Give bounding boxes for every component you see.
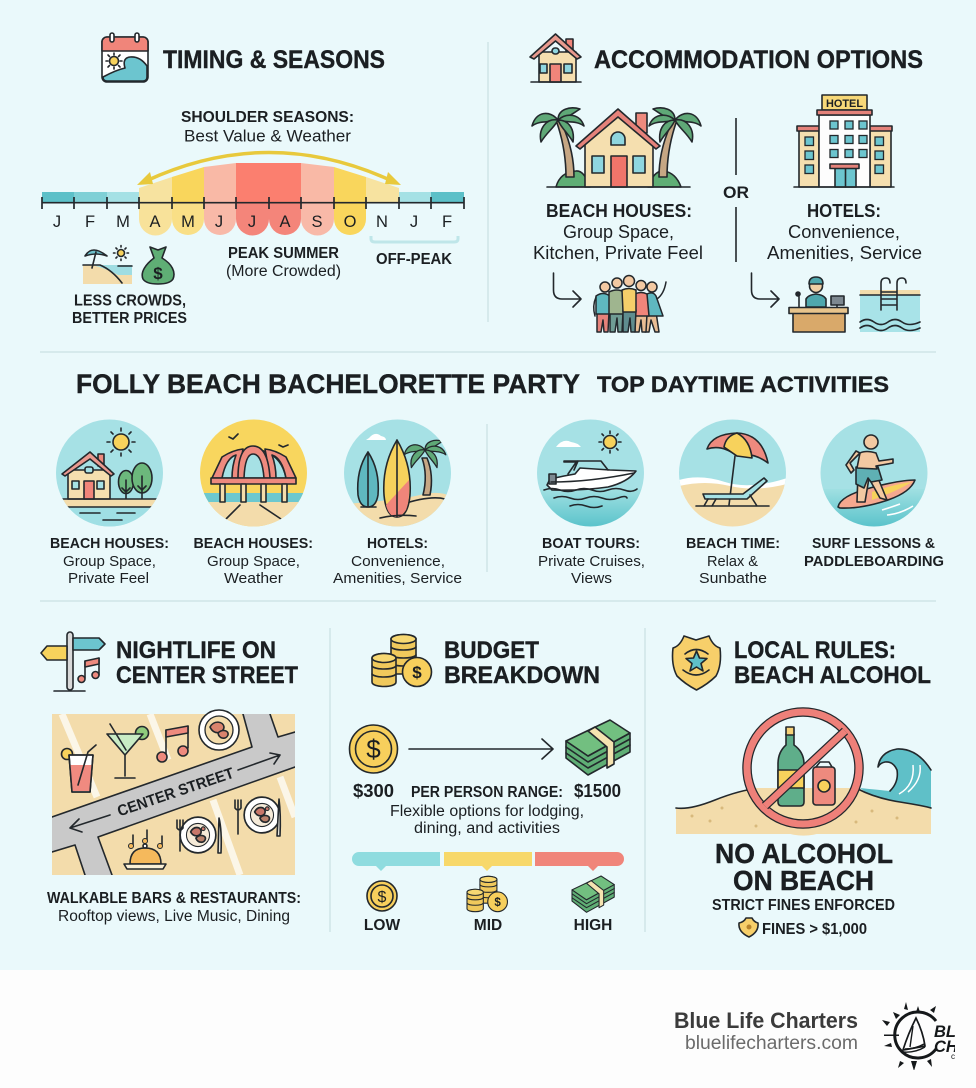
heading: ACCOMMODATION OPTIONS [594, 46, 923, 74]
icon: music note [157, 726, 188, 762]
panel: accommodation options [530, 34, 923, 332]
heading: LOCAL RULES: [734, 637, 896, 664]
text: beach houses: Kitchen, Private Feel [533, 243, 703, 263]
tier: mid: MID [474, 917, 502, 934]
text: surf lessons [804, 535, 944, 570]
fines callout [739, 918, 867, 938]
main title: FOLLY BEACH BACHELORETTE PARTY [76, 369, 580, 399]
icon circle: umbrella and lounger [679, 419, 787, 528]
text: walkable bars: Rooftop views, Live Music, Dining [58, 908, 290, 925]
icon: swimming pool [860, 278, 920, 332]
panel: timing and seasons [42, 33, 464, 327]
panel: surf lessons [804, 419, 944, 570]
heading: NIGHTLIFE ON [116, 637, 276, 664]
chart: season timeline: M [181, 213, 195, 231]
chart: season timeline: N [376, 213, 388, 231]
panel: budget breakdown [350, 634, 630, 934]
tier: low [364, 881, 400, 934]
icon circle: surfer [820, 419, 928, 528]
text: no alcohol on beach: ON BEACH [733, 865, 874, 896]
arrows along street [70, 753, 280, 832]
text: boat tours: Private Cruises, [538, 553, 645, 570]
arrow: range [409, 739, 553, 759]
text: per person range: dining, and activities [414, 820, 560, 837]
text: less crowds: LESS CROWDS, [74, 292, 186, 310]
heading [444, 637, 600, 689]
footer: sailboat compass logo [882, 1002, 955, 1070]
text: boat tours: Views [571, 570, 612, 587]
text: hotels: Amenities, Service [767, 243, 922, 263]
text: per person range: PER PERSON RANGE: [411, 784, 563, 801]
panel: boat tours [537, 419, 645, 587]
arrow: to hotel services [752, 273, 779, 307]
icon circle: house on shore [56, 419, 164, 529]
label: center street: CENTER STREET [115, 765, 237, 820]
text: hotels convenience: HOTELS: [367, 535, 428, 552]
icon circle: surfboards and palm [344, 419, 452, 528]
text: shoulder seasons: SHOULDER SEASONS: [181, 109, 354, 126]
icon: cocktail drink [62, 745, 96, 792]
chart: season timeline [42, 152, 464, 236]
heading: TIMING & SEASONS [163, 46, 385, 74]
text: beach houses: Group Space, [563, 222, 674, 242]
tier: low: $ [378, 889, 387, 906]
icon: money bag [142, 247, 174, 284]
footer: brand text: Blue Life Charters [674, 1008, 858, 1033]
icon: coin stacks [372, 634, 432, 686]
icon: calendar with sun and wave [102, 33, 148, 82]
chart: season timeline: J [215, 213, 223, 231]
off-peak bracket and label [371, 236, 458, 268]
tier: low: LOW [364, 917, 400, 934]
footer: sailboat compass logo: c [951, 1052, 955, 1061]
text: hotels: HOTELS: [807, 201, 881, 221]
footer: brand text: bluelifecharters.com [685, 1033, 858, 1054]
tier: mid [467, 876, 507, 934]
icon: cash stack [566, 720, 630, 775]
text: shoulder seasons: Best Value & Weather [184, 128, 352, 146]
tier: high [572, 876, 614, 934]
text: surf lessons: SURF LESSONS & [812, 535, 935, 552]
text: beach time: BEACH TIME: [686, 535, 780, 552]
chart: season timeline: F [85, 213, 95, 231]
icon: low coin [350, 725, 398, 773]
text: peak summer: (More Crowded) [226, 263, 341, 280]
heading [734, 637, 931, 689]
arrow: to group [554, 273, 581, 307]
text: hotels convenience: Amenities, Service [333, 570, 462, 587]
panel: nightlife on center street [41, 632, 301, 925]
text: no alcohol on beach: STRICT FINES ENFORCED [712, 897, 895, 914]
heading: BREAKDOWN [444, 662, 600, 689]
off-peak bracket and label: OFF-PEAK [376, 251, 453, 268]
panel: beach houses circle 1 [50, 419, 169, 587]
divider: or: OR [723, 183, 749, 202]
text: beach houses weather: BEACH HOUSES: [194, 535, 313, 552]
chart: season timeline: O [344, 213, 357, 231]
tier: high: HIGH [574, 917, 612, 934]
text: beach houses private feel: BEACH HOUSES: [50, 535, 169, 552]
text: beach houses private feel [50, 535, 169, 587]
icon circle: pavilion [200, 419, 308, 528]
chart: season timeline: M [116, 213, 130, 231]
illustration: beach house with palms [532, 108, 701, 187]
chart: season timeline: J [410, 213, 418, 231]
icon: signpost and music note [41, 632, 105, 691]
text: no alcohol on beach: NO ALCOHOL [715, 838, 893, 869]
text: per person range: $300 [353, 781, 394, 801]
text: boat tours: BOAT TOURS: [542, 535, 640, 552]
text: less crowds: BETTER PRICES [72, 310, 187, 327]
panel: hotels circle [333, 419, 462, 587]
icon: low coin: $ [366, 734, 381, 764]
text: peak summer [226, 245, 341, 280]
icon: dinner plate one [177, 817, 221, 853]
text: beach houses weather: Group Space, [207, 553, 300, 570]
icon: police badge [672, 636, 720, 690]
text: beach houses: BEACH HOUSES: [546, 201, 692, 221]
chart: season timeline: A [149, 213, 161, 231]
icon: beach umbrella and sun [83, 246, 132, 284]
icon: small house [530, 34, 581, 82]
text: hotels: Convenience, [788, 222, 900, 242]
heading: CENTER STREET [116, 662, 298, 689]
text: beach houses private feel: Private Feel [68, 570, 149, 587]
map: center street [52, 710, 295, 875]
text: hotels convenience [333, 535, 462, 587]
text: beach time [686, 535, 780, 587]
text: beach houses weather: Weather [224, 570, 283, 587]
text: hotels [767, 201, 922, 263]
text: no alcohol on beach [712, 838, 895, 914]
illustration: hotel [794, 95, 894, 187]
illustration: no alcohol on beach [676, 712, 931, 836]
icon circle: boat [537, 419, 645, 528]
fines callout: FINES > $1,000 [762, 921, 867, 938]
illustration: hotel: HOTEL [826, 98, 863, 110]
chart: season timeline: J [53, 213, 61, 231]
icon: cloche with notes [124, 830, 166, 869]
text: beach time: Relax & [707, 553, 758, 570]
heading [116, 637, 298, 689]
text: beach houses [533, 201, 703, 263]
heading: BUDGET [444, 637, 539, 664]
text: beach time: Sunbathe [699, 570, 767, 587]
text: peak summer: PEAK SUMMER [228, 245, 339, 262]
panel: beach time [679, 419, 787, 587]
text: per person range: Flexible options for lodging, [390, 803, 584, 820]
text: less crowds [72, 292, 187, 327]
text: per person range: $1500 [574, 781, 621, 801]
main title [76, 369, 889, 399]
text: beach houses weather [194, 535, 313, 587]
text: boat tours [538, 535, 645, 587]
chart: budget tiers bar [352, 852, 624, 871]
text: walkable bars: WALKABLE BARS & RESTAURANTS: [47, 890, 301, 907]
chart: season timeline: A [279, 213, 291, 231]
icon: group of friends [594, 276, 666, 332]
text: per person range [353, 781, 621, 837]
icon: dinner plate two [235, 797, 280, 836]
chart: season timeline: F [442, 213, 452, 231]
icon: reception desk [789, 277, 848, 332]
icon: money bag: $ [153, 264, 163, 283]
subtitle: TOP DAYTIME ACTIVITIES [597, 372, 889, 397]
heading: BEACH ALCOHOL [734, 662, 931, 689]
text: beach houses private feel: Group Space, [63, 553, 156, 570]
text: walkable bars [47, 890, 301, 925]
chart: season timeline: J [248, 213, 256, 231]
panel: beach houses circle 2 [194, 419, 313, 587]
text: surf lessons: PADDLEBOARDING [804, 553, 944, 570]
text: shoulder seasons [181, 109, 354, 146]
footer: brand text [674, 1008, 858, 1054]
text: hotels convenience: Convenience, [351, 553, 445, 570]
icon: top plate [199, 710, 239, 750]
icon: martini [107, 724, 148, 778]
chart: season timeline: S [311, 213, 323, 231]
panel: local rules [672, 636, 931, 938]
